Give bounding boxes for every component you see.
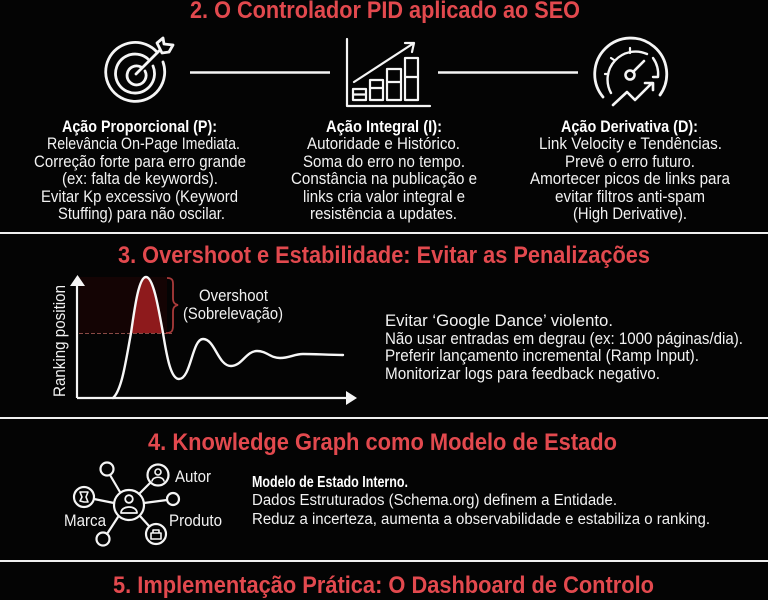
text block: integral action: Ação Integral (I): xyxy=(326,118,442,136)
text block: internal state model xyxy=(252,474,710,528)
label: product: Produto xyxy=(169,512,222,530)
text block: derivative action: Amortecer picos de links para xyxy=(530,170,731,188)
text block: internal state model: Reduz a incerteza, aumenta a observabilidade e estabiliza o ranking. xyxy=(252,511,710,528)
text block: integral action: Constância na publicação e xyxy=(291,170,477,188)
text block: overshoot recommendations: Preferir lançamento incremental (Ramp Input). xyxy=(385,347,699,365)
text block: overshoot recommendations: Não usar entradas em degrau (ex: 1000 páginas/dia). xyxy=(385,330,743,348)
text block: internal state model: Modelo de Estado Interno. xyxy=(252,474,408,491)
text block: derivative action: Ação Derivativa (D): xyxy=(561,118,698,136)
text block: integral action: Autoridade e Histórico. xyxy=(307,135,460,153)
text block: derivative action: evitar filtros anti-spam xyxy=(555,188,705,206)
text block: overshoot recommendations: Evitar ‘Google Dance’ violento. xyxy=(385,312,613,330)
axis arrowheads xyxy=(70,275,357,405)
label: brand: Marca xyxy=(64,512,107,530)
text block: integral action: resistência a updates. xyxy=(310,205,457,223)
text block: proportional action: Relevância On-Page Imediata. xyxy=(47,135,240,153)
label: author: Autor xyxy=(175,468,211,486)
icon: speedometer gauge with trend arrow xyxy=(595,38,667,105)
text block: proportional action: Correção forte para erro grande xyxy=(34,153,246,171)
response curve xyxy=(113,277,343,398)
heading: section 4: 4. Knowledge Graph como Modelo de Estado xyxy=(148,429,617,456)
overshoot translation label: (Sobrelevação) xyxy=(183,305,283,323)
text block: proportional action: Stuffing) para não oscilar. xyxy=(58,205,225,223)
author node xyxy=(148,464,168,486)
setpoint dashed line xyxy=(79,332,172,334)
overshoot label: Overshoot xyxy=(199,287,268,305)
text block: derivative action xyxy=(530,118,731,223)
heading: section 5: 5. Implementação Prática: O Dashboard de Controlo xyxy=(113,572,654,599)
heading: section 3: 3. Overshoot e Estabilidade: Evitar as Penalizações xyxy=(118,242,650,269)
icon: bar chart with rising arrow xyxy=(347,39,430,106)
empty nodes xyxy=(96,462,179,546)
text block: overshoot recommendations: Monitorizar logs para feedback negativo. xyxy=(385,365,660,383)
text block: proportional action: (ex: falta de keywords). xyxy=(62,170,218,188)
chart: overshoot response curve xyxy=(51,275,357,405)
text block: overshoot recommendations xyxy=(385,312,743,383)
text block: derivative action: (High Derivative). xyxy=(573,205,687,223)
text block: derivative action: Link Velocity e Tendências. xyxy=(539,135,722,153)
overshoot shaded band xyxy=(79,277,167,333)
text block: proportional action: Evitar Kp excessivo (Keyword xyxy=(41,188,238,206)
icon: target with arrow xyxy=(106,38,173,101)
text block: integral action: Soma do erro no tempo. xyxy=(303,153,465,171)
diagram: knowledge graph network xyxy=(64,462,222,546)
connector: integral to derivative xyxy=(438,71,578,74)
text block: integral action xyxy=(291,118,477,223)
network links xyxy=(94,475,167,534)
brand node xyxy=(74,487,94,507)
axes xyxy=(77,284,350,398)
text block: internal state model: Dados Estruturados (Schema.org) definem a Entidade. xyxy=(252,492,617,509)
central entity node xyxy=(114,490,144,520)
text block: proportional action: Ação Proporcional (P): xyxy=(62,118,217,136)
text block: proportional action xyxy=(34,118,246,223)
product node xyxy=(146,524,166,544)
y axis label: Ranking position xyxy=(51,285,69,397)
connector: proportional to integral xyxy=(190,71,330,74)
overshoot brace xyxy=(166,278,178,333)
overshoot red fill xyxy=(131,277,163,333)
text block: derivative action: Prevê o erro futuro. xyxy=(565,153,695,171)
text block: integral action: links cria valor integral e xyxy=(303,188,465,206)
